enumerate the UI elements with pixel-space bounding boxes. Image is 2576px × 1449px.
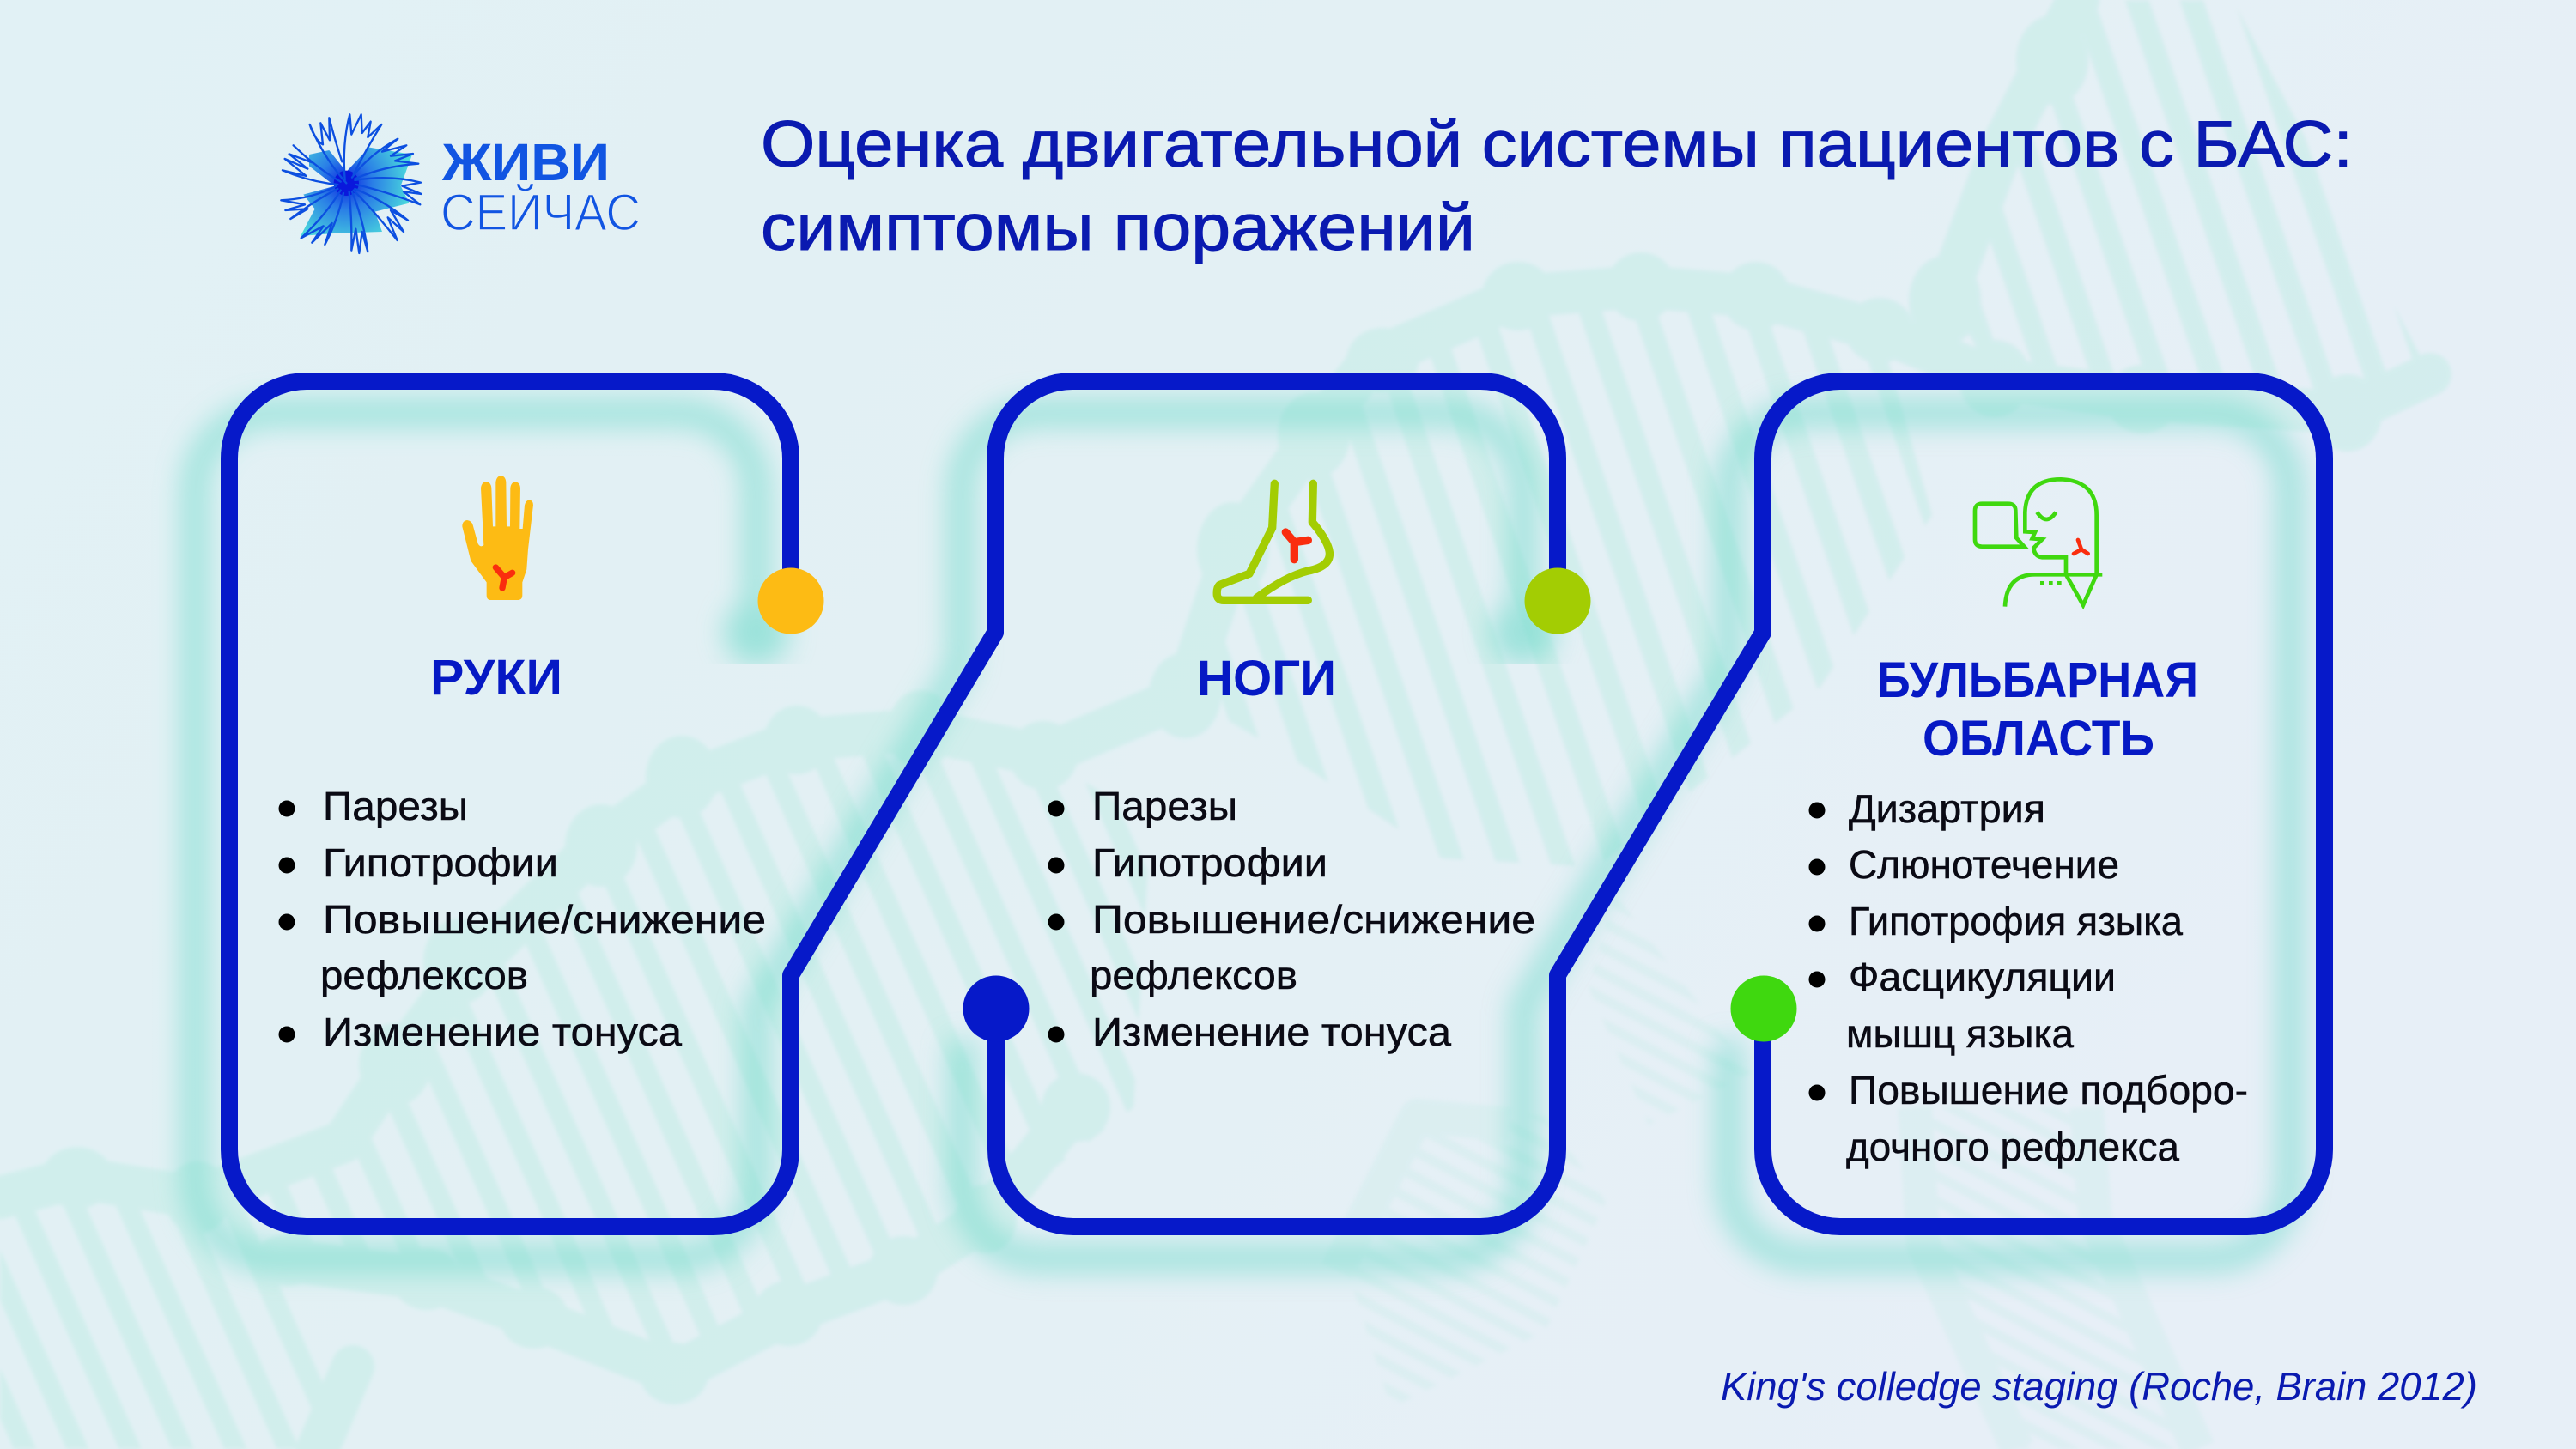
panel: legs	[1048, 483, 1535, 1054]
list: legs symptoms: Изменение тонуса	[1092, 1009, 1451, 1054]
icon: head speaking	[1975, 479, 2102, 607]
list: legs symptoms: рефлексов	[1090, 953, 1297, 997]
heading: bulbar region: БУЛЬБАРНАЯ	[1877, 652, 2198, 708]
logo wordmark: СЕЙЧАС: СЕЙЧАС	[440, 184, 641, 241]
list: legs symptoms: Повышение/снижение	[1092, 897, 1535, 942]
list: bulbar symptoms: Повышение подборо-	[1849, 1068, 2248, 1113]
node: blue	[963, 975, 1029, 1042]
list: arms symptoms	[278, 784, 766, 1054]
icon: cornflower	[281, 114, 422, 253]
list: arms symptoms: Изменение тонуса	[323, 1009, 682, 1054]
source citation: King's colledge staging (Roche, Brain 2012)	[1721, 1364, 2477, 1409]
list: arms symptoms: Повышение/снижение	[323, 897, 766, 942]
panel: arms	[278, 476, 766, 1054]
title: Оценка двигательной системы пациентов с БАС:	[761, 108, 2353, 181]
title: симптомы поражений	[761, 191, 1475, 264]
list: arms symptoms: Парезы	[323, 784, 468, 828]
logo	[281, 114, 641, 253]
icon: hand	[462, 476, 533, 600]
node: yellow	[757, 568, 824, 634]
list: arms symptoms: Гипотрофии	[323, 840, 558, 885]
connector shadow	[195, 413, 2290, 1258]
list: legs symptoms: Гипотрофии	[1092, 840, 1327, 885]
list: bulbar symptoms: Гипотрофия языка	[1849, 899, 2183, 943]
logo wordmark: ЖИВИ: ЖИВИ	[441, 133, 610, 191]
list: legs symptoms: Парезы	[1092, 784, 1237, 828]
list: legs symptoms	[1048, 784, 1535, 1054]
list: bulbar symptoms: Фасцикуляции	[1849, 955, 2116, 999]
node: green	[1731, 975, 1796, 1042]
list: bulbar symptoms: Слюнотечение	[1849, 842, 2119, 887]
heading: bulbar region	[1877, 652, 2198, 767]
panel: bulbar region	[1808, 479, 2248, 1169]
list: bulbar symptoms: Дизартрия	[1849, 786, 2045, 831]
background: small DNA helices	[1337, 893, 2198, 1449]
connector outline: arms to legs	[229, 381, 1558, 1227]
list: bulbar symptoms: дочного рефлекса	[1846, 1125, 2179, 1169]
connector outline: legs to bulbar	[996, 381, 2324, 1227]
title	[761, 108, 2353, 264]
heading: arms: РУКИ	[430, 650, 562, 706]
list: bulbar symptoms: мышц языка	[1846, 1011, 2074, 1056]
node: lime	[1525, 568, 1590, 634]
list: arms symptoms: рефлексов	[320, 953, 528, 997]
heading: bulbar region: ОБЛАСТЬ	[1923, 711, 2154, 767]
icon: foot	[1217, 483, 1329, 600]
heading: legs: НОГИ	[1197, 651, 1336, 706]
list: bulbar symptoms	[1808, 786, 2248, 1169]
